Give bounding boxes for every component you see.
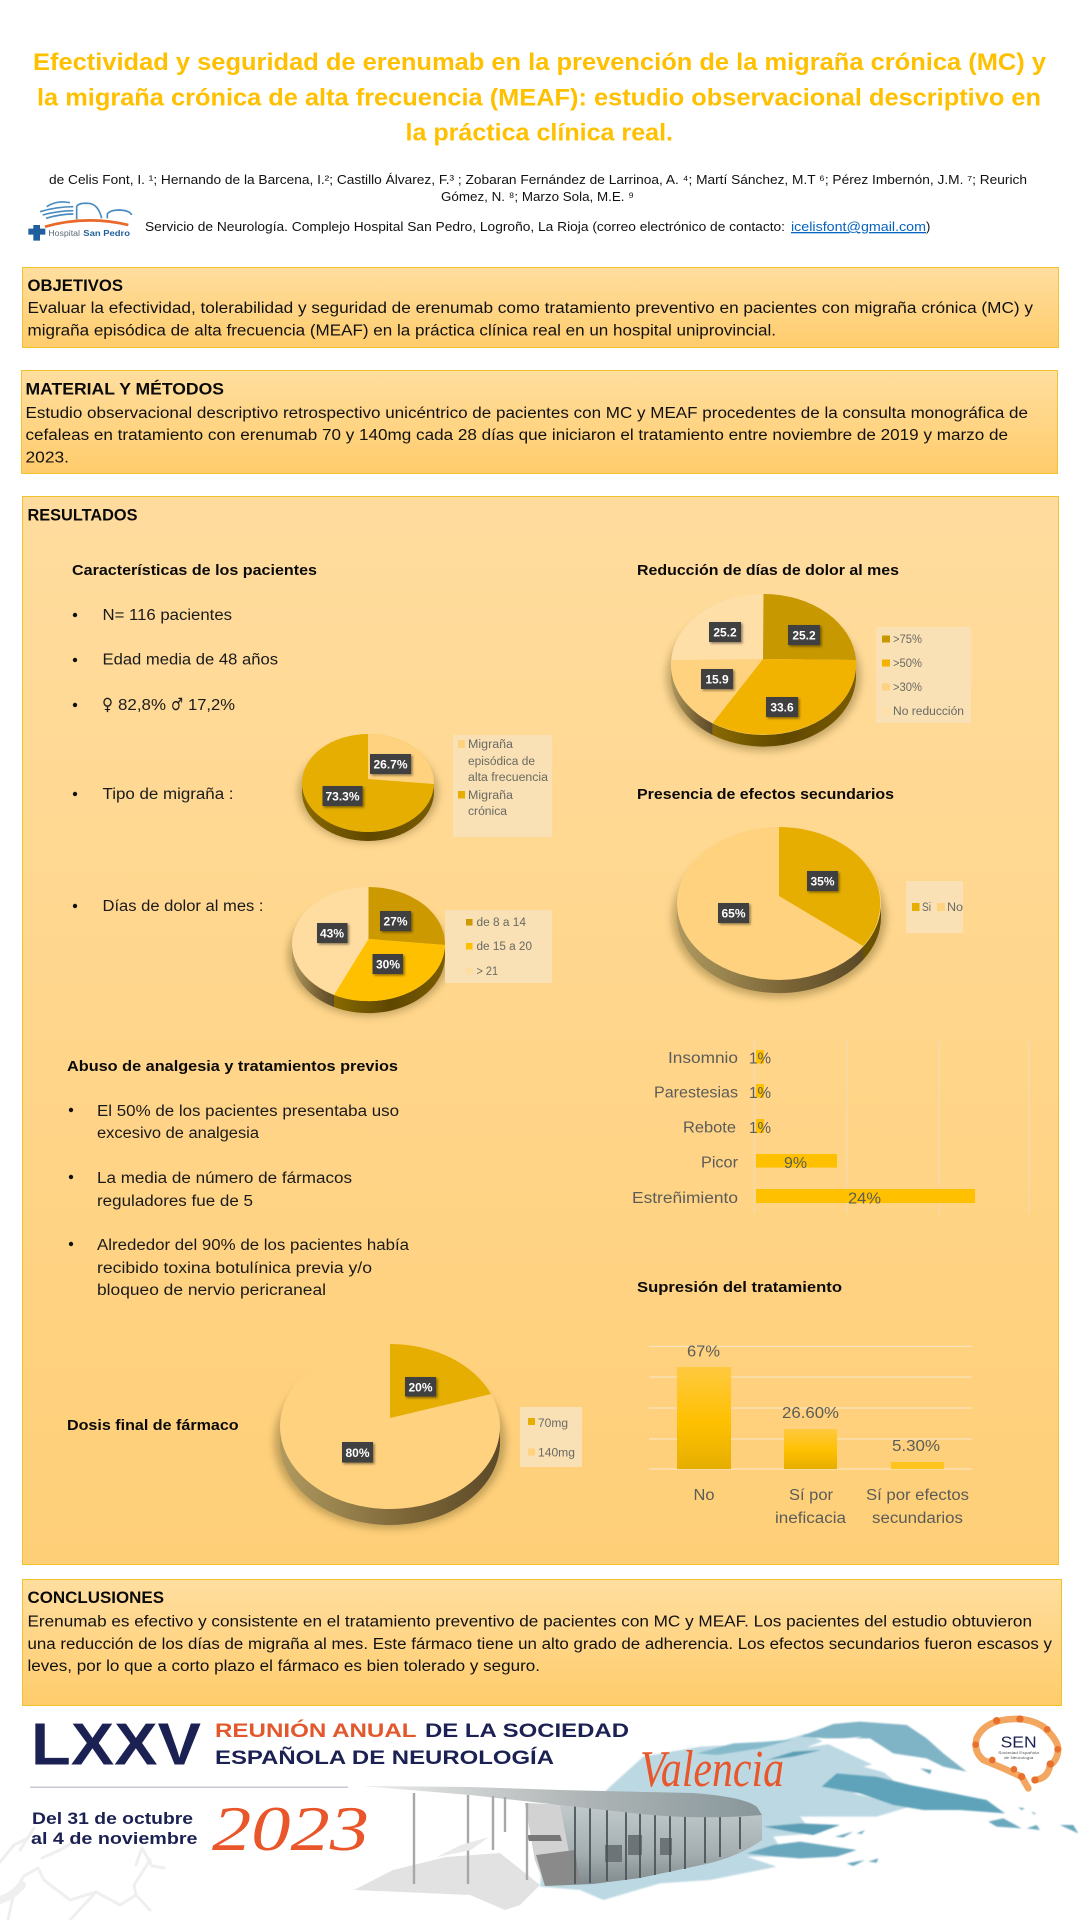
bar axis labels: Insomnio: [668, 1050, 738, 1067]
heading: conclusiones: CONCLUSIONES: [28, 1589, 164, 1607]
label 15.9: [701, 669, 733, 689]
legend: efectos secundarios: No: [947, 902, 963, 914]
legend: tipo de migrana: Migraña: [468, 790, 514, 802]
slice: si: [779, 827, 880, 946]
legend: dosis: 70mg: [538, 1418, 568, 1430]
slice: mas de 50: [713, 659, 856, 735]
list: analgesia: reguladores fue de 5: [97, 1193, 253, 1210]
legend: tipo de migrana: Migraña: [468, 739, 514, 751]
legend: dosis: 140mg: [538, 1448, 575, 1460]
text: conclusiones: Erenumab es efectivo y consistente en el tratamiento preventivo de pacientes con MC y MEAF. Los pacientes del estudio obtuvieron: [28, 1614, 1032, 1631]
SEN logo: [972, 1715, 1061, 1788]
legend: reduccion: No reducción: [893, 706, 964, 718]
SEN logo: Sociedad Española: [998, 1751, 1039, 1755]
columns: [414, 1793, 527, 1884]
subheading: caracteristicas: Características de los pacientes: [72, 562, 317, 579]
list: analgesia: [69, 1103, 409, 1299]
list: analgesia: La media de número de fármacos: [97, 1170, 352, 1187]
lens canopy: [437, 1837, 489, 1857]
affiliation: icelisfont@gmail.com: [791, 219, 926, 234]
title: la práctica clínica real.: [406, 120, 673, 146]
label 20: [405, 1377, 436, 1396]
legend: tipo de migrana: alta frecuencia: [468, 772, 549, 784]
slice: episodica: [368, 734, 434, 784]
SEN logo: de Neurología: [1004, 1756, 1033, 1760]
title: [33, 49, 1047, 146]
column values: 67%: [687, 1343, 720, 1360]
heading: resultados: RESULTADOS: [28, 507, 138, 525]
list: patient characteristics: [73, 607, 278, 915]
heading: objetivos: OBJETIVOS: [28, 277, 123, 295]
text: material y metodos: Estudio observacional descriptivo retrospectivo unicéntrico de pacientes con MC y MEAF procedentes de la consulta monográfica de: [26, 405, 1028, 422]
label 43: 43%: [320, 926, 344, 940]
column chart: supresion del tratamiento: [649, 1343, 972, 1527]
label 30: 30%: [376, 958, 400, 972]
facade interior: [525, 1803, 575, 1886]
column categories: No: [694, 1487, 714, 1504]
list: patient characteristics: 17,2%: [188, 697, 235, 714]
column categories: [694, 1487, 969, 1527]
heading: reunion anual: DE LA SOCIEDAD: [425, 1720, 629, 1742]
list: analgesia: bloqueo de nervio pericraneal: [97, 1282, 326, 1299]
label 73.3: 73.3%: [325, 790, 360, 804]
list: patient characteristics: Tipo de migraña :: [102, 786, 234, 803]
label 43: [317, 923, 348, 943]
building ground: [354, 1853, 540, 1910]
label 27: [380, 911, 411, 931]
bar axis labels: Rebote: [683, 1120, 736, 1136]
title: Efectividad y seguridad de erenumab en la prevención de la migraña crónica (MC) y: [33, 49, 1047, 76]
pie chart: dosis final: [274, 1344, 506, 1529]
bar axis labels: Picor: [701, 1154, 738, 1172]
legend: reduccion: [876, 627, 971, 723]
panel: objetivos: [22, 268, 1058, 348]
label 80: 80%: [345, 1446, 370, 1460]
affiliation: Servicio de Neurología. Complejo Hospital San Pedro, Logroño, La Rioja (correo electrónico de contacto:: [145, 219, 785, 234]
pie chart: efectos secundarios: [672, 827, 886, 998]
bar chart: efectos adversos: [632, 1040, 1029, 1214]
title: la migraña crónica de alta frecuencia (MEAF): estudio observacional descriptivo en: [37, 84, 1041, 112]
glass panels: [605, 1835, 672, 1862]
legend: dias de dolor: > 21: [476, 966, 498, 978]
text: material y metodos: 2023.: [26, 450, 69, 467]
column categories: Sí por efectos: [866, 1487, 969, 1504]
bar values: 24%: [848, 1190, 881, 1208]
panel: conclusiones: [22, 1580, 1062, 1706]
subheading: abuso de analgesia: Abuso de analgesia y tratamientos previos: [67, 1058, 398, 1075]
hospital logo: San Pedro: [83, 229, 130, 238]
pie chart: tipo de migrana: [298, 734, 438, 842]
list: analgesia: excesivo de analgesia: [97, 1125, 259, 1142]
legend: efectos secundarios: [906, 881, 963, 933]
legend: efectos secundarios: Si: [922, 902, 931, 914]
label 27: 27%: [383, 914, 408, 928]
panel: material y metodos: [22, 370, 1058, 474]
legend: dias de dolor: de 15 a 20: [476, 941, 532, 953]
authors: Gómez, N. ⁸; Marzo Sola, M.E. ⁹: [441, 190, 634, 204]
panel: resultados: [22, 496, 1058, 1564]
text: conclusiones: leves, por lo que a corto plazo el fármaco es bien tolerado y seguro.: [28, 1658, 540, 1675]
column values: [687, 1343, 940, 1455]
slice: 15 a 20: [334, 939, 445, 1001]
text: material y metodos: cefaleas en tratamiento con erenumab 70 y 140mg cada 28 días que iniciaron el tratamiento entre noviembre de 2019 y marzo de: [26, 427, 1008, 444]
list: patient characteristics: ♀: [102, 695, 113, 715]
decorative river lines: [0, 1828, 164, 1920]
text: conclusiones: [28, 1614, 1052, 1675]
text: conclusiones: una reducción de los días de migraña al mes. Este fármaco tiene un alto grado de adherencia. Los efectos secundarios fueron escasos y: [28, 1636, 1052, 1653]
subheading: reduccion: Reducción de días de dolor al mes: [637, 562, 899, 579]
text: objetivos: [28, 300, 1033, 340]
slice: 8 a 14: [368, 887, 445, 945]
dates: [31, 1810, 198, 1848]
heading: reunion anual: ESPAÑOLA DE NEUROLOGÍA: [215, 1746, 554, 1769]
dates: al 4 de noviembre: [31, 1830, 198, 1848]
bar values: 9%: [784, 1155, 807, 1172]
column categories: secundarios: [872, 1510, 963, 1527]
legend: tipo de migrana: [453, 735, 552, 837]
legend: reduccion: >30%: [893, 682, 922, 694]
heading: material y metodos: MATERIAL Y MÉTODOS: [26, 380, 224, 399]
legend: reduccion: >75%: [893, 634, 922, 646]
SEN logo: SEN: [1001, 1735, 1037, 1752]
label 65: [718, 903, 749, 923]
label 65: 65%: [721, 906, 746, 920]
label 30: [372, 954, 403, 974]
pie chart: reduccion de dias: [666, 594, 860, 751]
column categories: Sí por: [789, 1487, 833, 1504]
label 15.9: 15.9: [705, 672, 729, 686]
legend: reduccion: >50%: [893, 658, 922, 670]
legend: dias de dolor: [445, 910, 552, 983]
list: analgesia: El 50% de los pacientes presentaba uso: [97, 1103, 399, 1120]
column values: 26.60%: [782, 1405, 839, 1422]
subheading: efectos secundarios: Presencia de efectos secundarios: [637, 786, 894, 803]
city: Valencia: [640, 1741, 784, 1798]
label 26.7: 26.7%: [373, 758, 408, 772]
list: analgesia: recibido toxina botulínica previa y/o: [97, 1260, 372, 1277]
facade: [525, 1803, 762, 1886]
bar axis labels: Estreñimiento: [632, 1190, 738, 1207]
legend: tipo de migrana: crónica: [468, 806, 508, 818]
dates: Del 31 de octubre: [32, 1810, 193, 1828]
slice: mas de 30: [671, 659, 763, 723]
list: patient characteristics: N= 116 pacientes: [102, 607, 232, 624]
year: 2023: [212, 1793, 369, 1864]
heading: reunion anual: REUNIÓN ANUAL: [215, 1718, 417, 1742]
bar values: 1%: [749, 1050, 771, 1068]
label 25.2 right: 25.2: [792, 628, 816, 642]
heading: LXXV: LXXV: [31, 1712, 201, 1778]
column categories: ineficacia: [775, 1510, 846, 1527]
label 33.6: [766, 697, 798, 717]
heading: reunion anual: [215, 1718, 629, 1769]
label 80: [342, 1442, 373, 1462]
label 35: [807, 871, 838, 891]
subheading: dosis final: Dosis final de fármaco: [67, 1417, 239, 1434]
column: no: [677, 1367, 731, 1469]
column: ineficacia: [784, 1429, 837, 1469]
list: patient characteristics: Edad media de 48 años: [102, 652, 278, 669]
column values: 5.30%: [892, 1438, 940, 1455]
subheading: supresion: Supresión del tratamiento: [637, 1279, 842, 1296]
list: analgesia: Alrededor del 90% de los pacientes había: [97, 1237, 409, 1254]
bar values: 1%: [749, 1120, 771, 1137]
label 25.2 left: [709, 622, 741, 642]
authors: [49, 172, 1027, 204]
label 20: 20%: [408, 1380, 433, 1394]
building: [362, 1786, 762, 1886]
legend: dias de dolor: de 8 a 14: [476, 917, 527, 929]
text: material y metodos: [26, 405, 1028, 467]
slice: 70mg: [390, 1344, 491, 1418]
label 25.2 right: [788, 625, 820, 645]
authors: de Celis Font, I. ¹; Hernando de la Barcena, I.²; Castillo Álvarez, F.³ ; Zobaran Fernández de Larrinoa, A. ⁴; Martí Sánchez, M.T ⁶; Pérez Imbernón, J.M. ⁷; Reurich: [49, 172, 1027, 187]
hospital logo: [28, 202, 132, 241]
roof: [362, 1786, 762, 1817]
bar axis labels: Parestesias: [654, 1084, 738, 1102]
legend: dosis: [520, 1407, 582, 1467]
column: efectos secundarios: [891, 1462, 944, 1469]
list: patient characteristics: 82,8%: [118, 697, 166, 714]
list: patient characteristics: Días de dolor al mes :: [102, 898, 264, 915]
slice: mas de 75: [763, 594, 856, 660]
footer banner: [0, 1712, 1078, 1920]
bar axis labels: [632, 1050, 738, 1207]
affiliation: ): [926, 219, 930, 234]
list: patient characteristics: ♂: [171, 695, 183, 715]
label 33.6: 33.6: [770, 700, 794, 714]
legend: tipo de migrana: episódica de: [468, 756, 535, 768]
bar values: [749, 1050, 881, 1208]
bar values: 1%: [749, 1085, 771, 1102]
watercolor wash: [540, 1722, 1078, 1900]
label 25.2 left: 25.2: [713, 626, 737, 640]
text: objetivos: Evaluar la efectividad, tolerabilidad y seguridad de erenumab como tratamiento preventivo en pacientes con migraña crónica (MC) y: [28, 300, 1033, 317]
hospital logo: Hospital: [48, 229, 80, 238]
pie chart: dias de dolor: [288, 887, 450, 1016]
label 35: 35%: [810, 874, 835, 888]
text: objetivos: migraña episódica de alta frecuencia (MEAF) en la práctica clínica real en un hospital uniprovincial.: [28, 322, 776, 340]
